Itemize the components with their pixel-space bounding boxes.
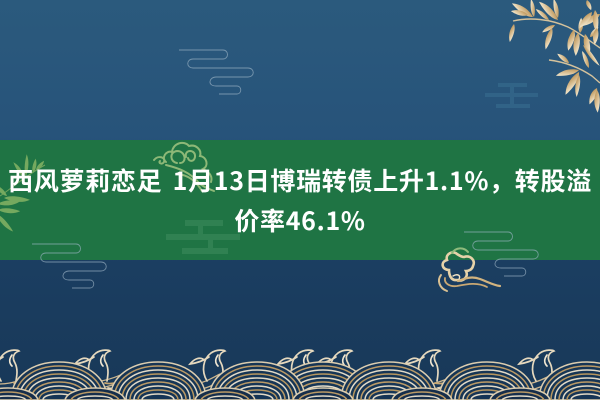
cloud ornament: in green band	[154, 143, 214, 191]
faint cloud bars: in green band	[166, 220, 240, 254]
gold auspicious cloud	[439, 248, 500, 291]
decorative stream line: lower right	[464, 232, 538, 276]
green title band	[0, 140, 600, 260]
title	[8, 162, 592, 238]
wave pattern: bottom border	[0, 350, 600, 400]
large wave domes	[275, 362, 371, 400]
bamboo branch: top right	[504, 0, 600, 113]
small foreground wave domes	[0, 388, 38, 400]
decorative stream line: lower left	[32, 244, 106, 288]
bamboo branch: left, in green band	[0, 154, 46, 235]
title: 西风萝莉恋足 1月13日博瑞转债上升1.1%，转股溢	[8, 162, 592, 198]
decorative stream line: upper	[179, 50, 253, 94]
title: 价率46.1%	[234, 202, 366, 238]
faint cloud bars: upper right	[485, 83, 538, 108]
connecting swells	[0, 371, 556, 390]
wave crests	[0, 350, 45, 389]
